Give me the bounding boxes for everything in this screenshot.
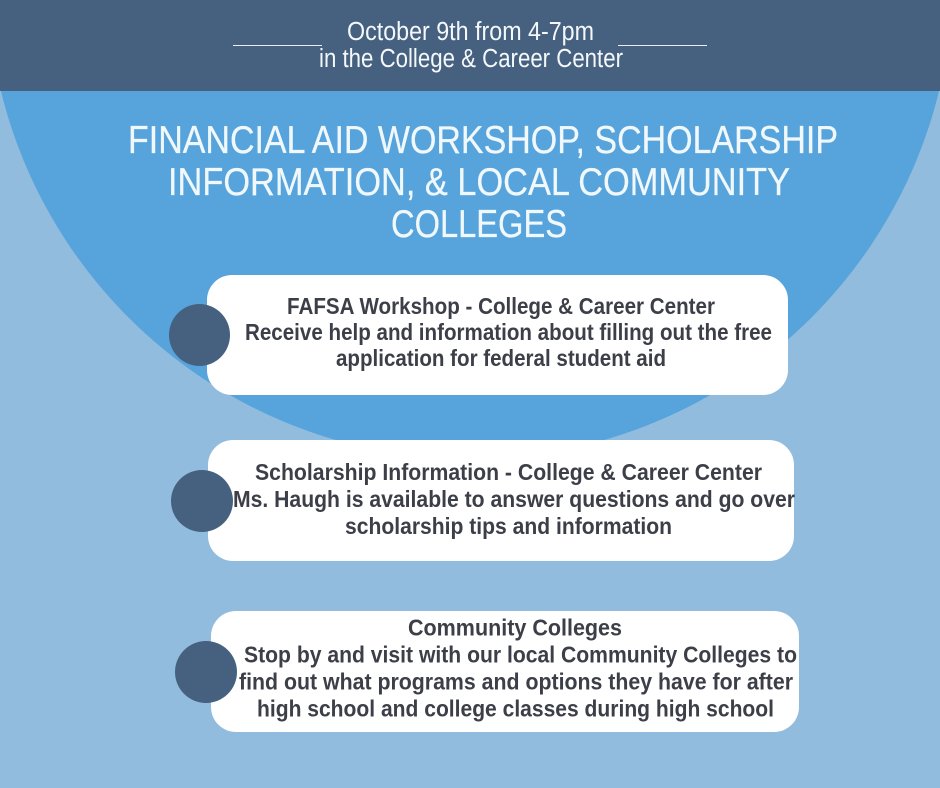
right header rule <box>618 45 707 46</box>
event location: in the College & Career Center <box>319 45 623 73</box>
scholarship information text: Ms. Haugh is available to answer questions and go over <box>233 486 795 512</box>
icon: bullet circle <box>169 304 230 366</box>
title: INFORMATION, & LOCAL COMMUNITY <box>168 161 790 204</box>
large blue semicircle <box>0 0 940 459</box>
community colleges text: high school and college classes during high school <box>257 696 774 722</box>
FAFSA workshop text <box>245 293 772 371</box>
icon: bullet circle <box>171 470 233 532</box>
header band <box>0 0 940 91</box>
title: FINANCIAL AID WORKSHOP, SCHOLARSHIP <box>128 119 838 162</box>
scholarship information text <box>233 459 795 539</box>
left header rule <box>233 45 322 46</box>
community colleges text: find out what programs and options they have for after <box>239 668 793 694</box>
scholarship information text: Scholarship Information - College & Career Center <box>255 459 762 485</box>
panel: FAFSA workshop <box>169 275 788 395</box>
community colleges text: Community Colleges <box>408 614 622 640</box>
FAFSA workshop text: FAFSA Workshop - College & Career Center <box>287 293 715 319</box>
panel: scholarship information <box>171 440 795 561</box>
community colleges text <box>239 614 797 722</box>
title <box>128 119 838 246</box>
event date and time: October 9th from 4-7pm <box>347 18 594 46</box>
community colleges text: Stop by and visit with our local Community Colleges to <box>244 642 797 668</box>
icon: bullet circle <box>175 641 237 703</box>
FAFSA workshop text: Receive help and information about filling out the free <box>245 319 772 345</box>
scholarship information text: scholarship tips and information <box>345 513 672 539</box>
FAFSA workshop text: application for federal student aid <box>336 345 666 371</box>
panel: community colleges <box>175 611 799 732</box>
title: COLLEGES <box>391 203 567 246</box>
